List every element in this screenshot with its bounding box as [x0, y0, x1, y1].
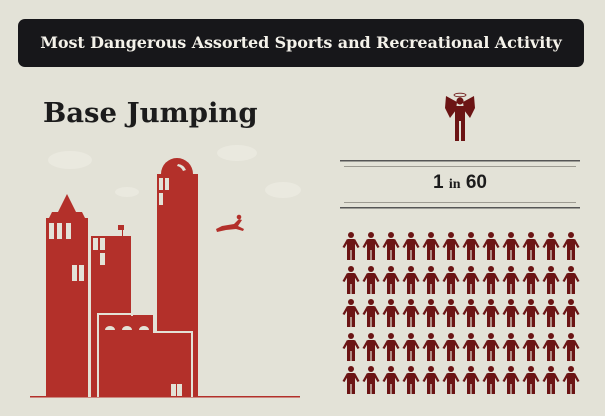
divider lines: [340, 160, 580, 208]
people grid: [342, 232, 580, 394]
heading: Base Jumping: [43, 97, 258, 129]
clouds: [48, 145, 301, 198]
title bar: [18, 19, 584, 67]
icon: angel: [445, 93, 475, 141]
building details (windows, outlines): [49, 164, 193, 397]
icon: jumper: [216, 215, 244, 232]
illustration: buildings: [30, 158, 300, 398]
title bar: Most Dangerous Assorted Sports and Recreational Activity: [40, 33, 562, 52]
ratio text: 1 in 60: [433, 172, 487, 193]
